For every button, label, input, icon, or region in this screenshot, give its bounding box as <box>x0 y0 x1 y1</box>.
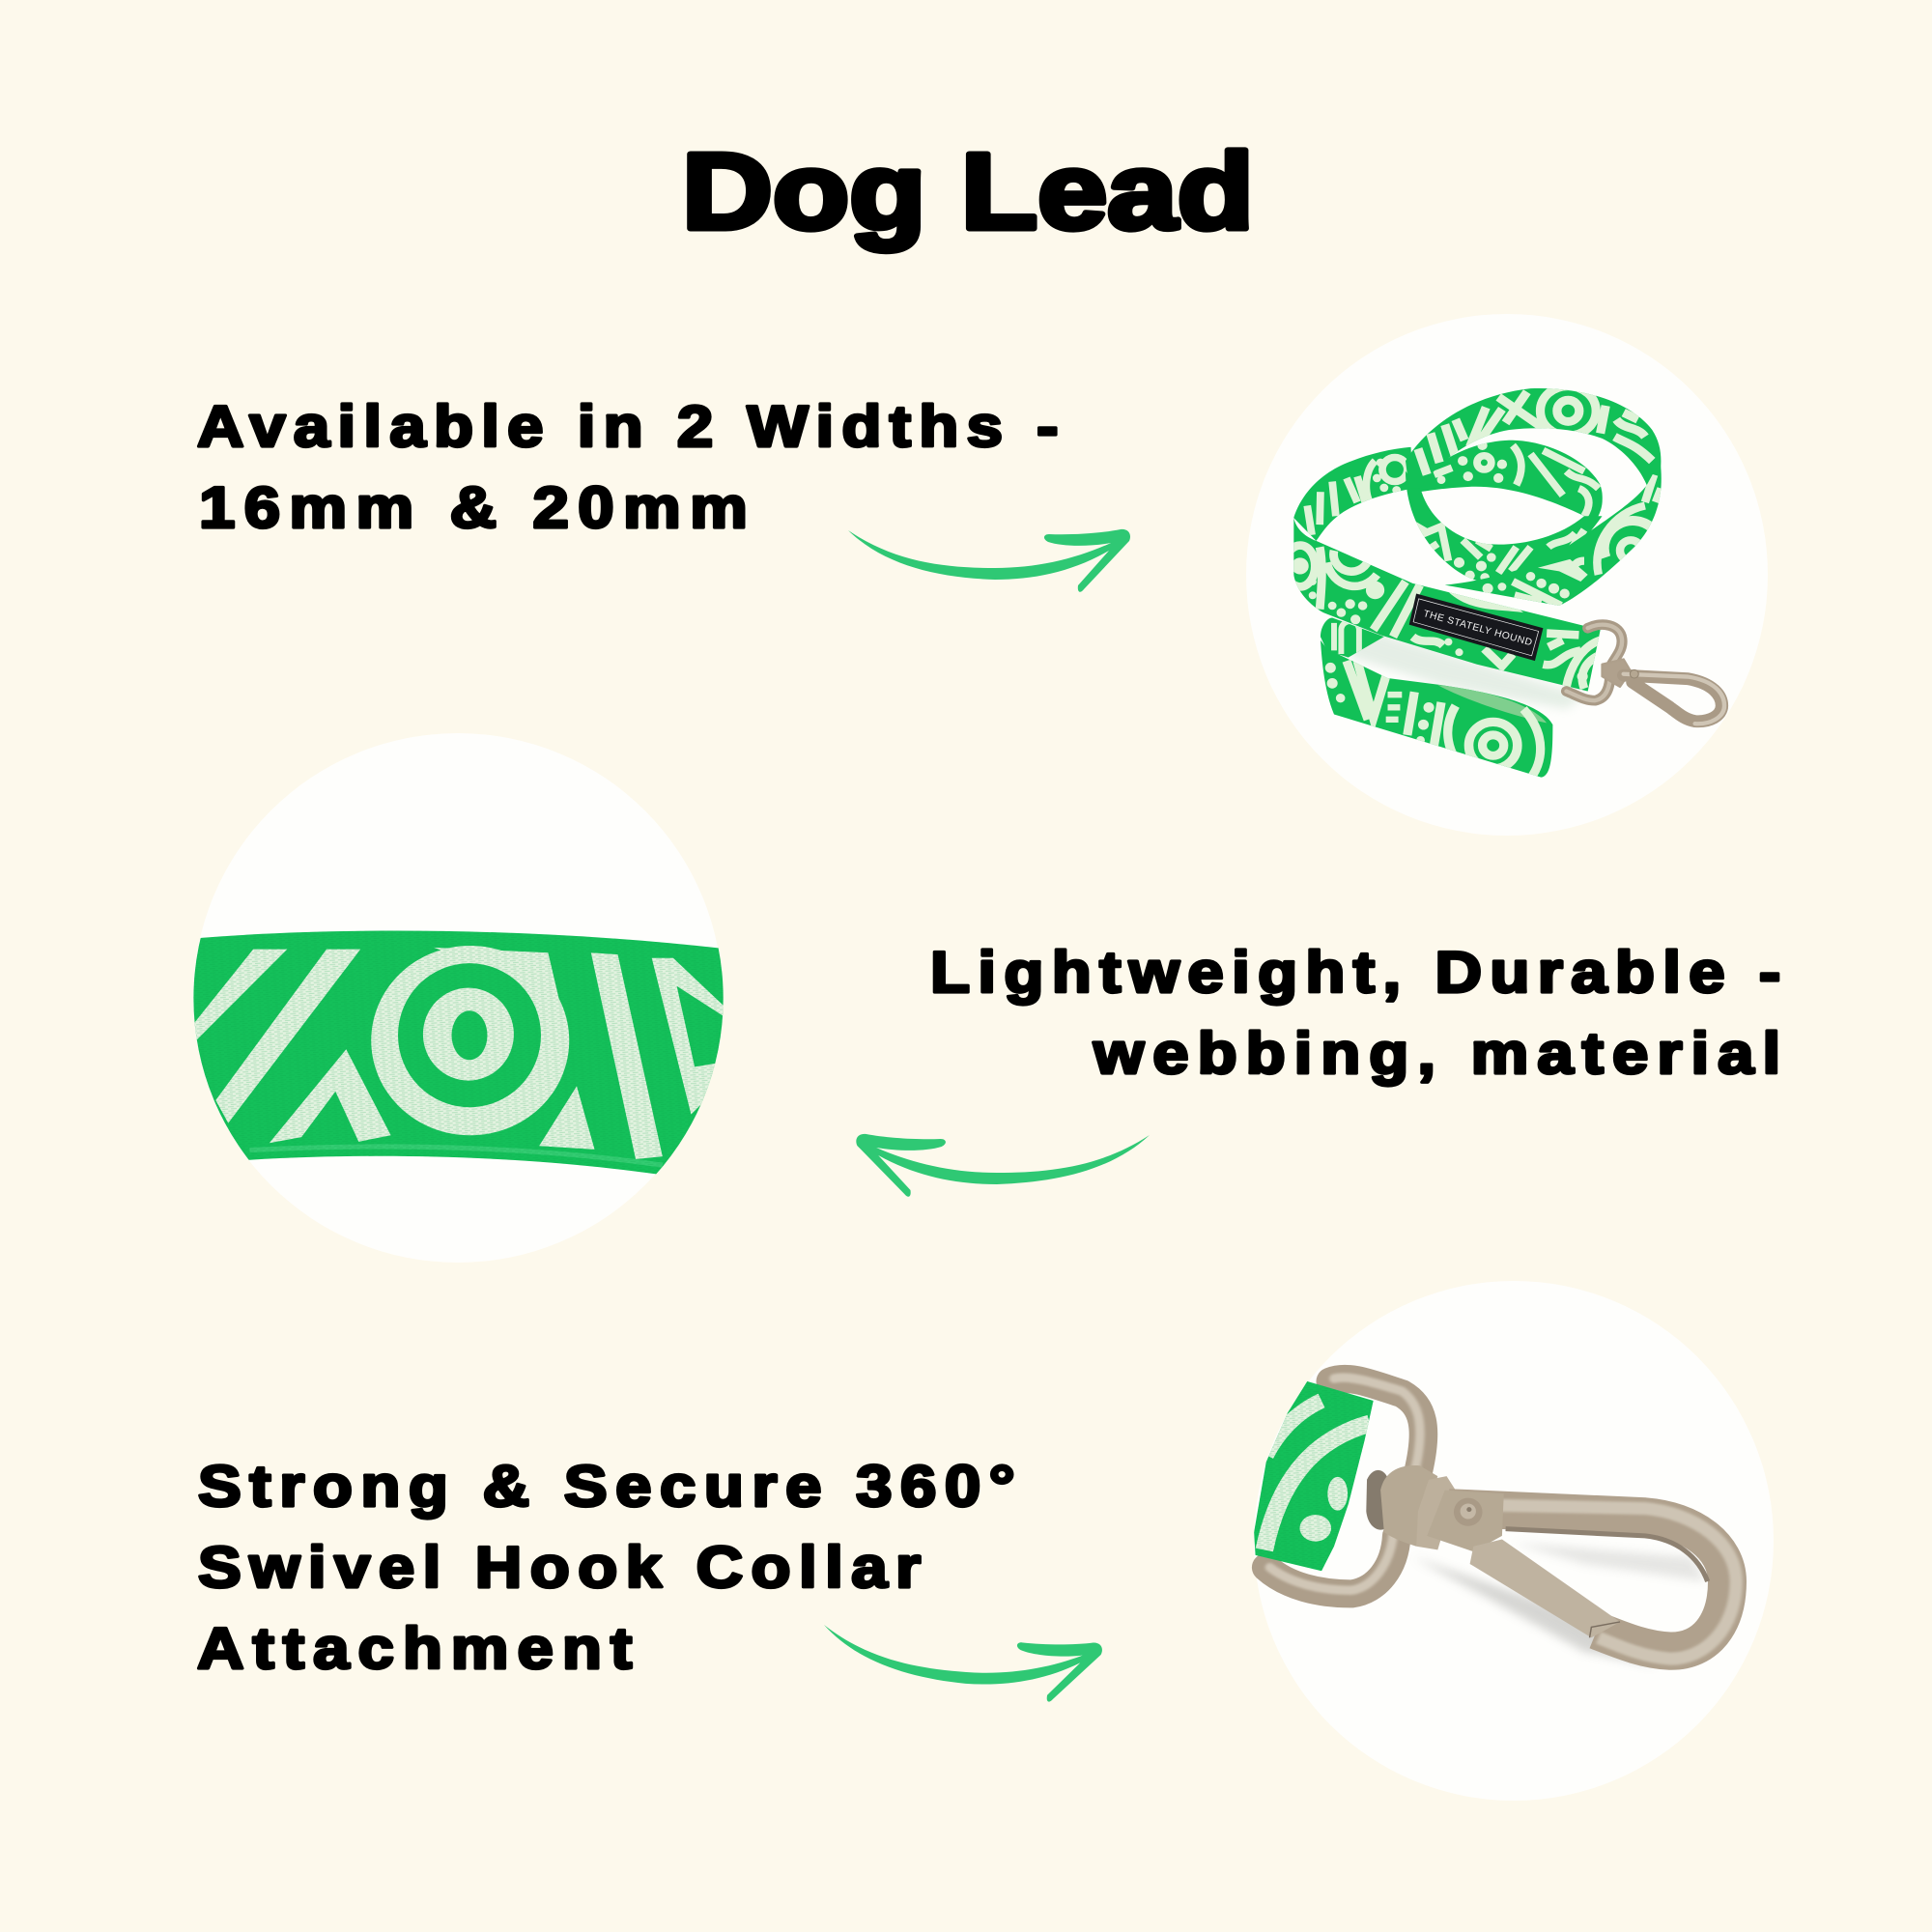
swivel hook close-up <box>1248 1378 1736 1665</box>
shadow under lead <box>1334 619 1584 709</box>
swivel block <box>1380 1465 1437 1547</box>
photo background <box>1246 314 1768 836</box>
webbing strap close-up <box>193 931 724 1175</box>
panel: lead photo circle <box>1246 314 1768 836</box>
panel: swivel hook close-up circle <box>1248 1281 1774 1801</box>
photo background <box>193 733 723 1263</box>
main strap <box>1293 518 1601 692</box>
brand label <box>1409 594 1543 661</box>
handle front <box>1321 640 1553 778</box>
spring gate <box>1470 1540 1620 1637</box>
arrow: swivel text to hook photo <box>820 1624 1102 1705</box>
ring bottom band <box>1406 471 1602 581</box>
gate seam <box>1590 1622 1620 1637</box>
handle back <box>1321 618 1384 658</box>
text block: lightweight: webbing, material <box>1093 1021 1780 1086</box>
text block: widths: 16mm & 20mm <box>199 475 748 540</box>
text block: swivel hook: Swivel Hook Collar <box>198 1535 921 1600</box>
text block: widths <box>197 394 1059 540</box>
arrow: lightweight text to webbing photo <box>856 1134 1150 1197</box>
text block: lightweight: Lightweight, Durable - <box>930 940 1780 1005</box>
swivel bolt <box>1366 1470 1389 1530</box>
arrow: widths to lead photo <box>848 529 1130 592</box>
far inner band <box>1418 440 1603 516</box>
webbing stub <box>1254 1381 1374 1571</box>
swivel collar <box>1416 1476 1456 1549</box>
panel: webbing close-up circle <box>184 733 744 1263</box>
metal swivel hook <box>1567 625 1724 724</box>
top band <box>1406 388 1662 485</box>
hook shadow <box>1412 1543 1706 1665</box>
text block: widths: Available in 2 Widths - <box>197 394 1059 459</box>
lead illustration <box>1281 384 1724 781</box>
brand label: THE STATELY HOUND <box>1422 609 1533 648</box>
photo background <box>1254 1281 1774 1801</box>
hook body <box>1448 1504 1736 1659</box>
hook neck <box>1427 1491 1504 1551</box>
back band <box>1293 446 1411 541</box>
descending strap <box>1445 466 1662 606</box>
metal D-ring <box>1266 1378 1424 1594</box>
title: Dog Lead <box>682 131 1254 251</box>
text block: swivel hook: Attachment <box>197 1616 632 1681</box>
text block: swivel hook: Strong & Secure 360° <box>198 1454 1015 1519</box>
text block: lightweight <box>930 940 1780 1086</box>
rivet <box>1454 1498 1483 1526</box>
text block: swivel hook <box>197 1454 1015 1681</box>
